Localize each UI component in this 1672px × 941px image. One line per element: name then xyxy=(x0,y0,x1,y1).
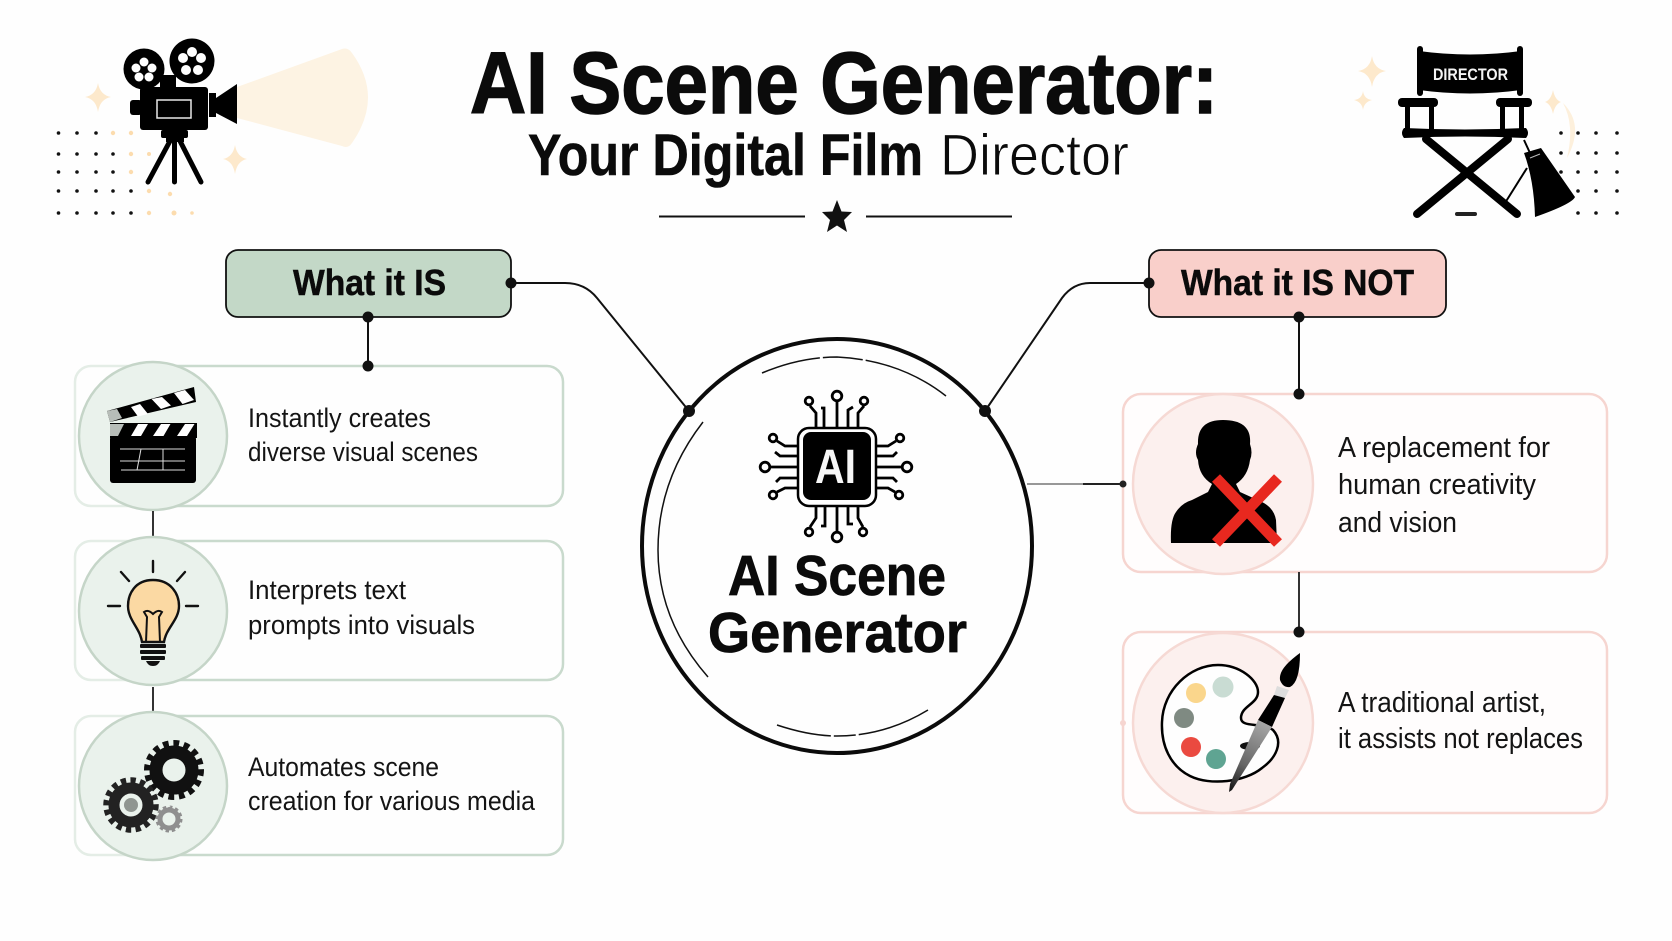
connector: What it IS NOT to first card xyxy=(1298,317,1300,394)
panel: card replacement xyxy=(1120,388,1607,574)
icon: clapperboard xyxy=(107,387,197,483)
heading: What it IS: What it IS xyxy=(293,262,446,303)
card text: A traditional artist, xyxy=(1338,687,1546,719)
card text: human creativity xyxy=(1338,469,1536,501)
connector: center to What it IS xyxy=(511,283,689,411)
panel: card automates xyxy=(75,712,563,860)
hub label xyxy=(708,544,967,665)
heading: What it IS NOT xyxy=(1144,250,1446,322)
card text: Automates scene xyxy=(248,752,439,782)
panel: card interprets text xyxy=(75,537,563,685)
connector: center to What it IS NOT xyxy=(985,283,1149,411)
icon: film camera with light beam xyxy=(57,38,368,216)
icon: light bulb xyxy=(108,561,198,666)
connector: replacement to traditional artist card xyxy=(1298,572,1300,632)
card text: it assists not replaces xyxy=(1338,723,1583,755)
icon: palette and brush xyxy=(1162,653,1300,792)
card text: Instantly creates xyxy=(248,403,431,433)
panel: card traditional artist xyxy=(1120,626,1607,813)
subtitle: Director xyxy=(940,123,1129,188)
connector: card 1 to card 2 xyxy=(152,511,154,537)
card text: diverse visual scenes xyxy=(248,437,478,467)
icon: AI chip xyxy=(760,391,912,542)
card text: creation for various media xyxy=(248,786,536,816)
icon: director chair with megaphone xyxy=(1354,46,1619,217)
subtitle: Your Digital Film xyxy=(528,123,923,188)
card text xyxy=(248,403,478,467)
icon: AI chip: AI xyxy=(815,441,856,494)
connector: What it IS to first card xyxy=(367,317,369,366)
hub label: AI Scene xyxy=(728,544,946,608)
heading: What it IS xyxy=(226,250,516,322)
card text xyxy=(248,752,536,816)
card text: and vision xyxy=(1338,507,1457,539)
panel: card instantly creates xyxy=(75,360,563,510)
panel: central hub xyxy=(642,339,1032,753)
star divider xyxy=(659,200,1012,232)
card text xyxy=(248,575,475,640)
card text xyxy=(1338,687,1583,755)
card text: A replacement for xyxy=(1338,432,1550,464)
icon: gears xyxy=(106,744,200,831)
connector: hub to replacement card xyxy=(1027,483,1123,485)
chair label: DIRECTOR xyxy=(1433,65,1508,84)
icon: person crossed out xyxy=(1171,420,1278,543)
title: AI Scene Generator: xyxy=(470,35,1218,132)
hub label: Generator xyxy=(708,601,967,665)
card text xyxy=(1338,432,1550,539)
connector: card 2 to card 3 xyxy=(152,687,154,712)
card text: Interprets text xyxy=(248,575,406,605)
heading: What it IS NOT: What it IS NOT xyxy=(1181,262,1414,303)
card text: prompts into visuals xyxy=(248,610,475,640)
